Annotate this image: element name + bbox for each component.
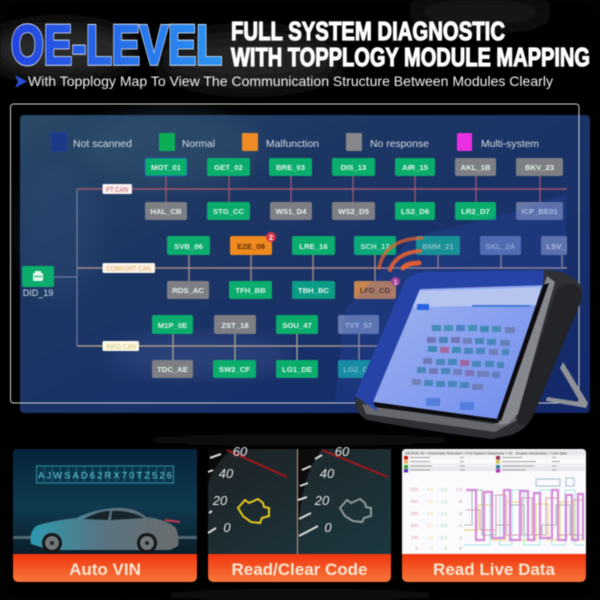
data table: DEVICE 00 > Automatic Selection > Full System Diagnosis > 01 · Engine electronics > Live data [405,452,568,456]
axis scales: 0.8 [441,523,447,528]
data table [403,450,585,472]
axis scales [410,487,462,551]
left gauge needle and ticks: 60 [233,444,248,459]
axis scales: 400 [410,499,418,504]
module nodes: WS1_D4 [276,207,307,216]
axis scales: 1.2 [441,511,447,516]
module nodes: WS2_D5 [338,207,370,216]
module nodes: BKV_23 [525,163,554,172]
module nodes: LSV_ [546,242,566,251]
module nodes: SKL_2A [486,242,516,251]
axis scales: 3.0 [427,511,433,516]
right gauge needle and ticks: 40 [320,466,335,481]
caption bar [402,554,586,582]
legend [51,133,539,151]
axis scales: 1.0 [456,487,462,492]
axis scales: 2.0 [441,487,447,492]
axis scales: 500 [410,487,418,492]
bus label: PT CAN: PT CAN [106,187,128,194]
module nodes: M1P_0E [158,321,187,330]
caption bar [13,554,197,582]
axis scales: 0 [444,546,447,551]
car illustration [31,508,180,553]
module nodes: ZST_18 [221,321,249,330]
left gauge needle and ticks: 0 [223,520,231,535]
gauge background [208,449,391,554]
module nodes: DIS_13 [341,163,366,172]
icon: grey check engine [340,499,371,522]
module nodes: EZE_09 [237,242,265,251]
module nodes: AKL_1B [461,163,491,172]
module nodes: TDC_AE [157,365,188,374]
module nodes: HAL_CB [150,207,182,216]
module nodes: BMM_21 [422,242,454,251]
legend: No response [370,138,429,150]
tablet device [355,270,588,439]
module nodes: GET_02 [214,163,243,172]
tablet body [355,270,582,439]
axis scales: .8 [458,499,462,504]
module nodes: LR2_D7 [461,207,490,216]
legend: Malfunction [266,138,319,150]
icon: wireless signal waves [379,238,422,270]
module nodes: TBH_BC [298,286,330,295]
tablet stand [546,362,588,408]
subtitle [15,73,553,89]
bus label: COMFORT CAN [102,263,155,273]
device beam overlay [335,193,567,403]
axis scales: 5.0 [427,487,433,492]
bus label: INFO CAN [102,341,139,351]
axis scales: 0 [459,546,462,551]
caption: Read/Clear Code [231,560,368,579]
module nodes: SW2_CF [219,365,250,374]
right gauge needle and ticks: 20 [314,493,330,508]
heading: OE-LEVEL: OE-LEVEL [11,13,222,76]
panel: topology map [10,104,590,413]
title [11,13,590,76]
axis scales: 1.6 [441,499,447,504]
white screen background [402,449,586,554]
tablet inner bezel [497,276,555,425]
axis scales: .6 [458,511,462,516]
module nodes: LG2_DF [343,365,373,374]
chart toolbar icons [536,478,574,486]
right gauge needle and ticks: 0 [324,520,332,535]
panel background [20,115,590,413]
left gauge needle and ticks: 40 [219,466,234,481]
axis scales: 2.0 [427,523,433,528]
panel: Read Live Data [402,449,586,582]
legend: Normal [182,138,215,150]
module nodes: RDS_AC [172,286,204,295]
subtitle text: With Topplogy Map To View The Communication Structure Between Modules Clearly [28,73,553,89]
right gauge needle and ticks [298,444,388,536]
axis scales: 100 [410,535,418,540]
module nodes: LG1_DE [282,365,312,374]
icon: arrow bullet [15,75,27,88]
badge: EZE_09 count [266,232,276,242]
module nodes: LS2_D6 [401,207,429,216]
tablet screen header [412,287,541,307]
caption: Auto VIN [69,560,141,579]
right gauge needle and ticks: 60 [335,444,350,459]
gateway node: DID_19: DID_19 [23,288,53,298]
module nodes: LRE_16 [299,242,328,251]
VIN code strip [36,466,174,483]
badge: LFD_CD count [391,277,400,286]
heading: OE-LEVEL: OE-LEVEL [11,13,222,76]
tablet side grip [517,283,582,425]
badge: LFD_CD count: 1 [394,280,398,286]
module nodes: SVB_06 [174,242,203,251]
tablet lower rim [362,404,517,432]
badge: EZE_09 count: 2 [269,233,273,242]
axis scales: 0 [415,546,418,551]
legend: Multi-system [481,138,539,150]
module nodes: STG_CC [213,207,245,216]
module nodes: BRE_03 [276,163,305,172]
module nodes [145,158,567,378]
tablet screen [373,285,543,419]
heading: full system diagnostic: FULL SYSTEM DIAGNOSTIC [231,16,505,46]
left gauge needle and ticks [208,444,287,535]
gateway node: DID_19 [22,266,54,298]
caption: Read Live Data [433,560,555,579]
tablet blue wash on left bezel [355,270,544,412]
module nodes: ICP_BE01 [521,207,558,216]
axis scales: 300 [410,511,418,516]
axis scales: .4 [458,523,462,528]
panel outline [10,104,579,403]
axis scales: 4.0 [427,499,433,504]
bus label: PT CAN [102,184,132,194]
axis scales: 0.4 [441,535,447,540]
axis scales: 0 [430,546,433,551]
tablet screen mini modules [412,325,515,410]
axis scales: 200 [410,523,418,528]
module nodes: SCH_17 [360,242,390,251]
icon: yellow check engine [238,499,269,523]
module nodes: MOT_01 [151,163,182,172]
module nodes: AIR_15 [402,163,429,172]
module nodes: TVT_57 [345,321,372,330]
left gauge needle and ticks: 20 [212,493,228,508]
VIN code strip: AJWSAD62RX70TZ526 [38,470,172,482]
module nodes: TFH_BB [235,286,266,295]
panel: Auto VIN [13,449,197,582]
bus label: INFO CAN: INFO CAN [106,344,136,351]
module nodes: SOU_47 [282,321,312,330]
panel: Read/Clear Code [208,444,391,582]
bus lines [54,176,567,360]
axis scales: .2 [458,535,462,540]
live data waveforms [464,490,584,545]
caption bar [208,554,391,582]
module nodes: LFD_CD [360,286,391,295]
axis scales: 1.0 [427,535,433,540]
VIN image background [13,449,197,554]
legend: Not scanned [73,138,132,150]
bus label: COMFORT CAN: COMFORT CAN [106,266,151,273]
